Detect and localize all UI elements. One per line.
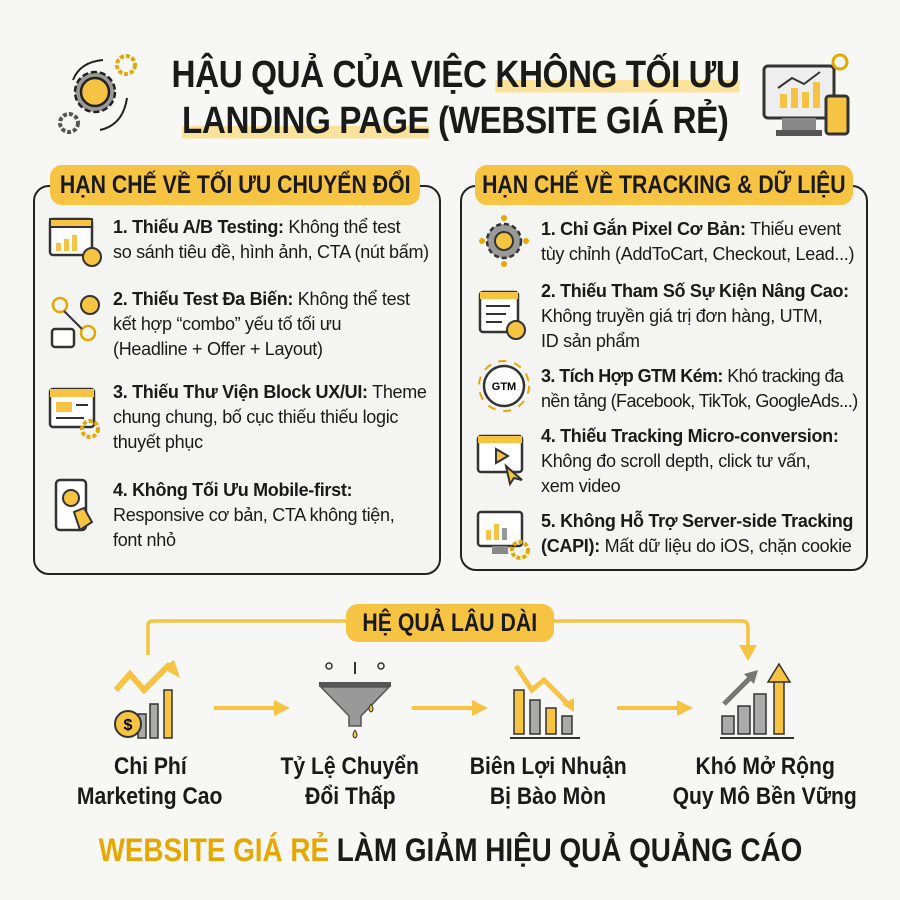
arrow 1 [214, 700, 290, 716]
label: hard to scale: Quy Mô Bền Vững [673, 783, 857, 810]
item 4 left: font nhỏ [113, 530, 176, 550]
label: low conversion: Đổi Thấp [305, 783, 395, 810]
item 2 right: 2. Thiếu Tham Số Sự Kiện Nâng Cao: [541, 281, 849, 301]
icon: video click [476, 434, 524, 486]
item 1 left [113, 217, 429, 262]
icon: GTM [478, 360, 530, 412]
label: marketing cost [77, 753, 223, 810]
icon: scaling growth [720, 662, 794, 739]
panel: conversion limits [33, 185, 441, 575]
item 3 left: chung chung, bố cục thiếu thiếu logic [113, 407, 398, 427]
label: low conversion [280, 753, 419, 810]
item 5 right: (CAPI): Mất dữ liệu do iOS, chặn cookie [541, 536, 851, 556]
icon: mobile [54, 478, 94, 532]
icon: GTM: GTM [492, 381, 516, 393]
item 1 right [541, 218, 854, 264]
icon: gears [58, 54, 137, 134]
item 4 left [113, 480, 394, 550]
item 1 left: so sánh tiêu đề, hình ảnh, CTA (nút bấm) [113, 242, 429, 262]
title: HẬU QUẢ CỦA VIỆC KHÔNG TỐI ƯU [171, 54, 739, 96]
label: marketing cost: Marketing Cao [77, 783, 223, 810]
item 2 right: ID sản phẩm [541, 331, 640, 351]
icon: funnel [319, 662, 391, 738]
item 2 left: kết hợp “combo” yếu tố tối ưu [113, 314, 341, 334]
item 3 left: 3. Thiếu Thư Viện Block UX/UI: Theme [113, 382, 427, 402]
icon: multivariate [50, 295, 100, 348]
title: LANDING PAGE (WEBSITE GIÁ RẺ) [182, 100, 728, 142]
icon: gear pixel [479, 215, 529, 267]
item 5 right [541, 510, 853, 556]
item 3 right: 3. Tích Hợp GTM Kém: Khó tracking đa [541, 366, 843, 386]
item 1 right: tùy chỉnh (AddToCart, Checkout, Lead...) [541, 244, 854, 264]
item 3 left: thuyết phục [113, 432, 203, 452]
item 4 right: xem video [541, 476, 620, 496]
icon: declining profit [510, 664, 580, 739]
footer statement: WEBSITE GIÁ RẺ LÀM GIẢM HIỆU QUẢ QUẢNG CÁO [98, 832, 802, 868]
item 2 right: Không truyền giá trị đơn hàng, UTM, [541, 306, 822, 326]
item 1 left: 1. Thiếu A/B Testing: Không thể test [113, 217, 400, 237]
heading: tracking limits: HẠN CHẾ VỀ TRACKING & DỮ LIỆU [482, 171, 846, 199]
item 5 right: 5. Không Hỗ Trợ Server-side Tracking [541, 511, 853, 531]
icon: rising cost: $ [124, 717, 133, 734]
item 3 left [113, 382, 427, 452]
label: low conversion: Tỷ Lệ Chuyển [281, 753, 419, 780]
item 2 left [113, 289, 410, 359]
icon: monitor chart [762, 54, 850, 136]
heading: long-term consequences: HỆ QUẢ LÂU DÀI [363, 609, 537, 637]
item 2 left: (Headline + Offer + Layout) [113, 339, 323, 359]
arrow 3 [617, 700, 693, 716]
label: profit margin: Biên Lợi Nhuận [470, 753, 626, 780]
connector arrow: long-term [146, 619, 757, 661]
icon: rising cost [114, 660, 180, 739]
label: hard to scale: Khó Mở Rộng [695, 753, 835, 780]
item 1 right: 1. Chỉ Gắn Pixel Cơ Bản: Thiếu event [541, 219, 841, 239]
item 4 right: Không đo scroll depth, click tư vấn, [541, 451, 810, 471]
heading: tracking limits [475, 165, 853, 205]
panel: tracking limits [460, 185, 868, 571]
icon: server monitor [476, 510, 530, 560]
item 4 right: 4. Thiếu Tracking Micro-conversion: [541, 426, 839, 446]
item 4 right [541, 426, 839, 496]
item 3 right: nền tảng (Facebook, TikTok, GoogleAds...) [541, 391, 858, 411]
icon: layout [48, 388, 100, 439]
label: profit margin: Bị Bào Mòn [490, 783, 606, 810]
label: marketing cost: Chi Phí [114, 753, 186, 780]
item 4 left: Responsive cơ bản, CTA không tiện, [113, 505, 394, 525]
icon: ab chart [48, 218, 102, 267]
label: profit margin [470, 753, 626, 810]
title [171, 52, 740, 142]
item 2 right [541, 281, 849, 351]
label: hard to scale [673, 753, 857, 810]
heading: conversion limits: HẠN CHẾ VỀ TỐI ƯU CHUYỂN ĐỔI [60, 171, 410, 199]
heading: conversion limits [50, 165, 420, 205]
heading: long-term consequences [346, 604, 554, 642]
icon: form dollar [478, 290, 526, 340]
item 2 left: 2. Thiếu Test Đa Biến: Không thể test [113, 289, 410, 309]
arrow 2 [412, 700, 488, 716]
item 4 left: 4. Không Tối Ưu Mobile-first: [113, 480, 352, 500]
item 3 right [541, 366, 858, 411]
